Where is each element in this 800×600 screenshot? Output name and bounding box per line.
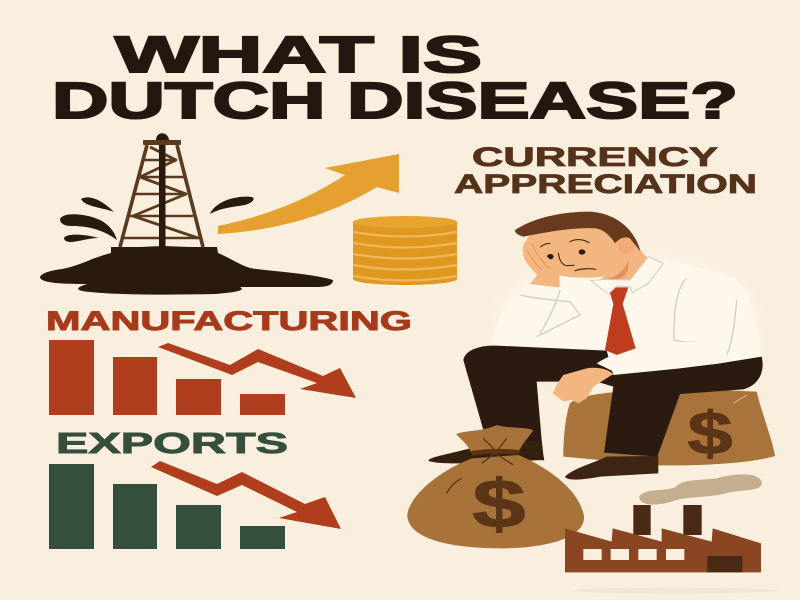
supporting hand — [523, 241, 560, 287]
shoes — [428, 441, 544, 463]
icon: factory with smoke — [565, 474, 762, 572]
shirt — [490, 260, 762, 375]
finger lines — [527, 243, 550, 270]
forearm sleeve — [597, 342, 720, 374]
face features — [537, 240, 596, 271]
illustration: worried man on money bags — [407, 212, 778, 594]
title: WHAT IS — [115, 26, 482, 83]
heading: currency appreciation: APPRECIATION — [454, 169, 757, 199]
icon: front money bag — [407, 425, 584, 548]
tie — [605, 287, 636, 355]
soft halo — [483, 243, 770, 397]
shirt creases — [520, 278, 737, 355]
floor shadow — [572, 588, 778, 594]
lower hand — [553, 368, 613, 403]
bar chart: exports — [49, 464, 285, 549]
heading: manufacturing: MANUFACTURING — [46, 306, 412, 336]
title: DUTCH DISEASE? — [52, 72, 738, 129]
arrow: rising gold — [218, 154, 399, 234]
icon: rear money bag — [563, 389, 775, 467]
icon: front money bag: $ — [472, 466, 526, 542]
heading: currency appreciation — [454, 142, 757, 199]
title — [52, 26, 738, 129]
hair — [515, 212, 641, 252]
ear — [617, 233, 635, 254]
heading: exports: EXPORTS — [56, 428, 288, 460]
heading: currency appreciation: CURRENCY — [472, 142, 718, 172]
arrow: exports decline — [151, 461, 341, 529]
collar — [591, 257, 663, 294]
icon: coin stack — [353, 216, 457, 285]
icon: oil derrick and spill — [40, 133, 333, 295]
trousers — [463, 346, 763, 461]
arrow: manufacturing decline — [158, 343, 356, 398]
head — [525, 223, 633, 278]
neck shadow — [603, 260, 629, 281]
neck — [600, 240, 648, 287]
bar chart: manufacturing — [49, 340, 285, 415]
icon: rear money bag: $ — [687, 400, 733, 467]
